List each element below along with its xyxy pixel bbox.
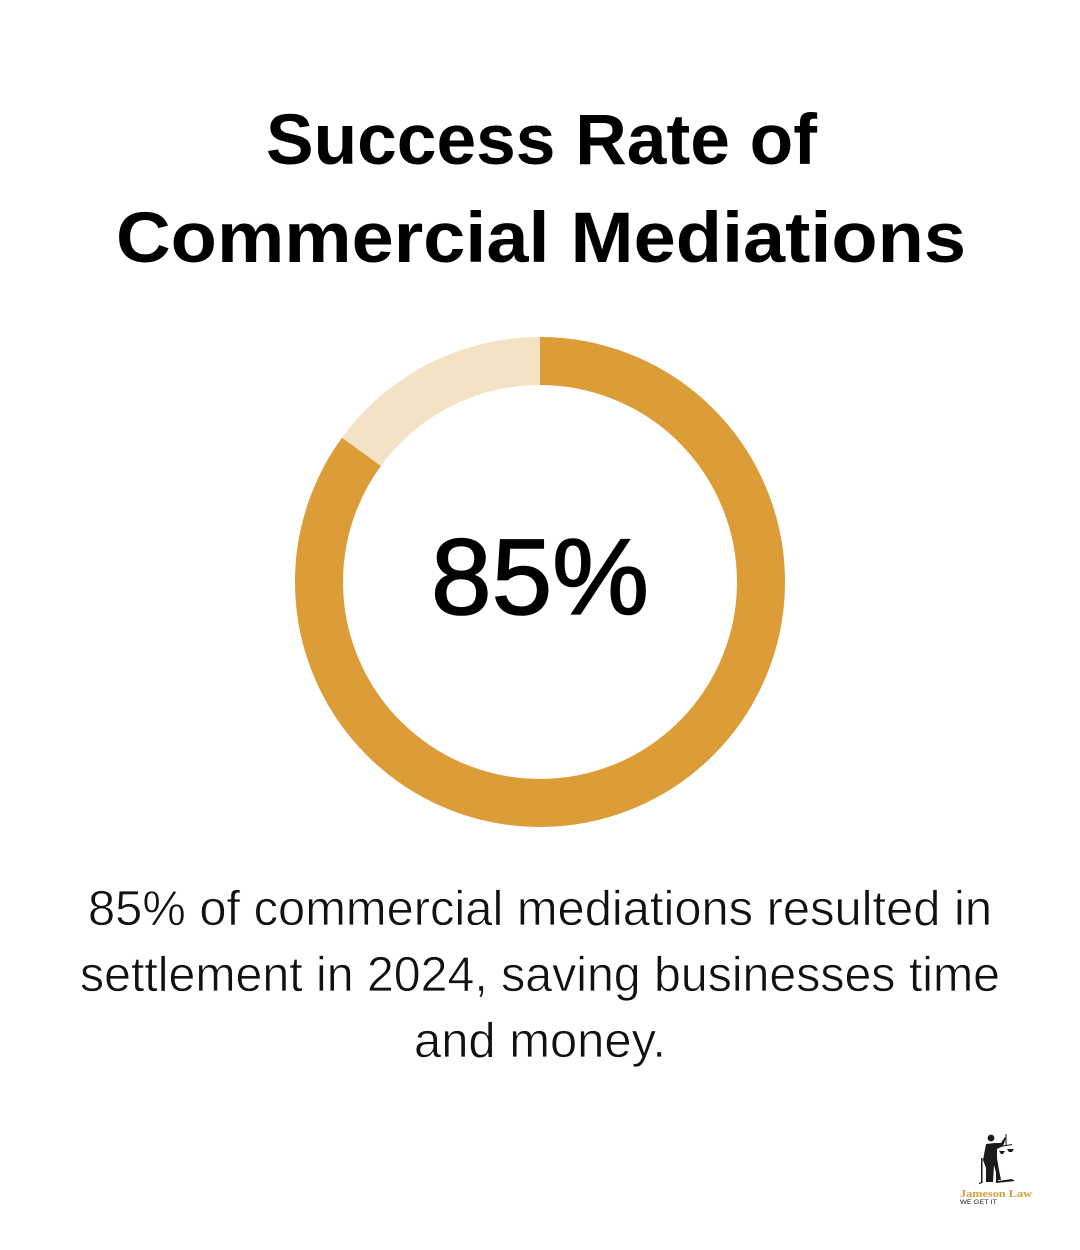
logo name: Jameson Law (960, 1189, 1032, 1200)
donut value: 85% (431, 516, 649, 637)
title: Success Rate of (266, 101, 817, 180)
description text: settlement in 2024, saving businesses time (80, 948, 1000, 1002)
donut chart: 85 percent (319, 361, 761, 803)
icon: lady justice (979, 1134, 1015, 1184)
description text (80, 882, 1000, 1068)
title (116, 101, 966, 278)
description text: 85% of commercial mediations resulted in (88, 882, 992, 936)
logo tagline: WE GET IT (960, 1199, 997, 1206)
logo: Jameson Law (960, 1134, 1032, 1206)
title: Commercial Mediations (116, 199, 966, 278)
description text: and money. (414, 1014, 666, 1068)
